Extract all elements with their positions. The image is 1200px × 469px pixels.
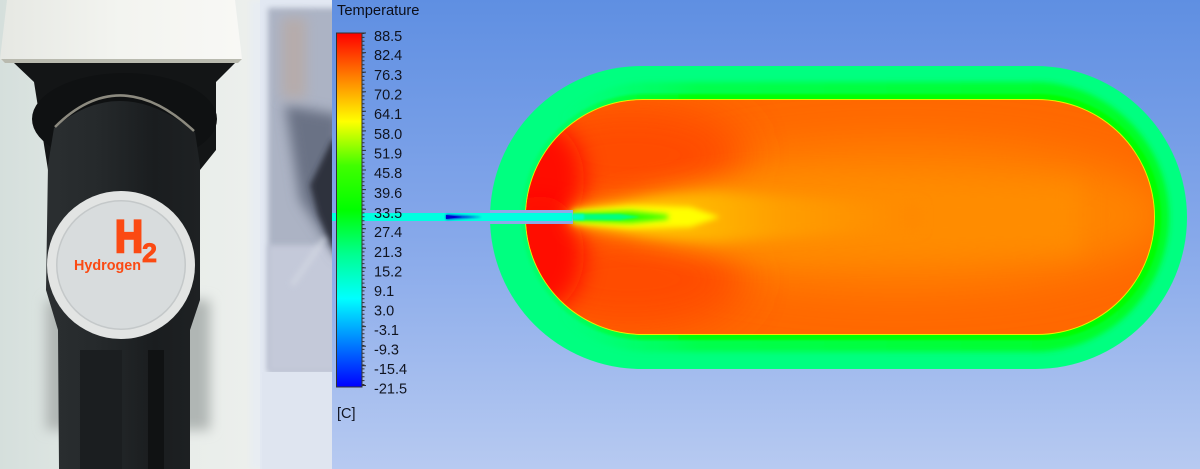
scale labels: -3.1 xyxy=(374,323,399,339)
scale labels: 58.0 xyxy=(374,127,402,143)
cap xyxy=(47,191,195,339)
panel: CFD temperature field xyxy=(332,0,1200,469)
scale labels: 3.0 xyxy=(374,304,394,320)
logo: 2 xyxy=(142,238,157,268)
scale labels xyxy=(374,29,407,398)
plume xyxy=(572,176,1080,258)
colour bar xyxy=(336,33,366,387)
legend: temperature colour scale xyxy=(336,3,419,422)
scale labels: 88.5 xyxy=(374,29,402,45)
scale labels: 45.8 xyxy=(374,166,402,182)
shadow on wall xyxy=(46,300,210,430)
scale labels: 9.1 xyxy=(374,284,394,300)
scale labels: 15.2 xyxy=(374,264,402,280)
unit label: [C] xyxy=(337,406,356,422)
tank inner edge xyxy=(525,99,1155,335)
body groove details xyxy=(80,350,164,469)
panel: hydrogen nozzle photo xyxy=(0,0,340,469)
scale labels: 21.3 xyxy=(374,245,402,261)
scale labels: 76.3 xyxy=(374,68,402,84)
white housing box xyxy=(0,0,242,62)
tank green mid layer xyxy=(514,82,1169,352)
scale labels: 51.9 xyxy=(374,146,402,162)
blurred background scene xyxy=(262,0,332,469)
legend title: Temperature xyxy=(337,3,419,19)
logo: H xyxy=(115,211,143,262)
scale labels: 70.2 xyxy=(374,88,402,104)
scale labels: -21.5 xyxy=(374,382,407,398)
logo: Hydrogen xyxy=(74,257,141,274)
black neck xyxy=(14,63,235,170)
nozzle body xyxy=(46,101,200,469)
scale labels: 64.1 xyxy=(374,107,402,123)
scale labels: 33.5 xyxy=(374,206,402,222)
injector pipe xyxy=(332,210,584,224)
scale labels: -9.3 xyxy=(374,342,399,358)
wall background xyxy=(0,0,260,469)
hot left regions xyxy=(515,103,745,207)
scale labels: -15.4 xyxy=(374,362,407,378)
tank gas temperature field xyxy=(496,100,1170,334)
metal ring xyxy=(55,95,194,131)
tank outer insulation xyxy=(490,66,1187,369)
scale labels: 82.4 xyxy=(374,48,402,64)
background gradient xyxy=(332,0,1200,469)
scale labels: 39.6 xyxy=(374,186,402,202)
collar xyxy=(32,104,217,141)
scale labels: 27.4 xyxy=(374,225,402,241)
logo xyxy=(74,219,156,273)
warm right region xyxy=(630,143,1170,287)
